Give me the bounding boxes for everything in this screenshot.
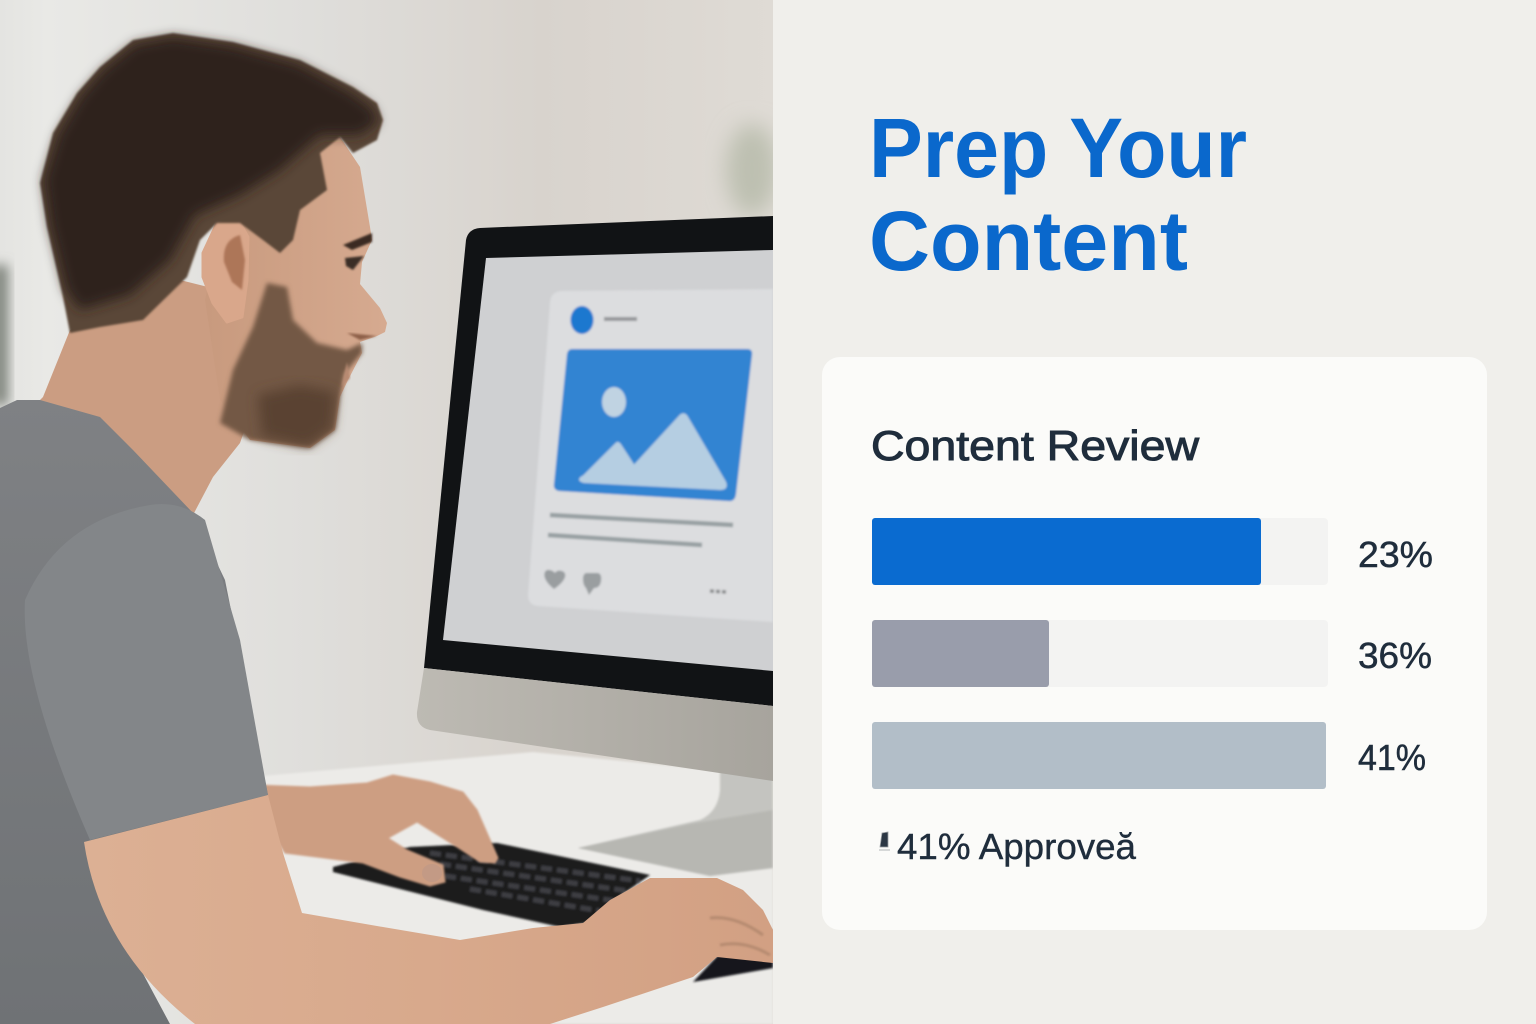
near arm and hand [84, 795, 773, 1024]
name line [604, 317, 637, 321]
blurred background objects [0, 124, 778, 405]
bar: 23% [872, 518, 1433, 585]
title [869, 101, 1247, 288]
white desk [262, 752, 773, 1024]
icon: small flag mark [879, 832, 890, 850]
monitor bezel [424, 216, 773, 706]
sleeve shading [25, 504, 268, 840]
eye [345, 256, 364, 270]
monitor [417, 216, 773, 781]
beard dark chin [258, 385, 335, 446]
text lines [550, 515, 733, 525]
knuckle shading [710, 918, 770, 955]
neck [40, 280, 244, 513]
eyebrow [343, 233, 372, 250]
wall background [0, 0, 773, 1024]
face [242, 137, 387, 448]
heart icon [544, 570, 565, 589]
hair dark core [44, 37, 378, 310]
monitor stand [578, 770, 773, 876]
image placeholder [554, 349, 752, 501]
bar: 41% [872, 722, 1426, 789]
sun [602, 387, 626, 417]
bar: 36% [872, 620, 1432, 687]
title: Content [869, 194, 1188, 288]
far hand thumbnail [422, 864, 442, 882]
ear [203, 223, 248, 322]
t-shirt [0, 400, 268, 1024]
avatar [570, 306, 594, 334]
panel: photo of man at computer [0, 0, 778, 1024]
bar: 41%: 41% [1358, 737, 1426, 778]
social post mockup [528, 289, 773, 622]
ear inner [224, 235, 245, 290]
man [0, 33, 773, 1024]
mountains [580, 414, 726, 489]
more dots [710, 591, 726, 592]
hair [40, 33, 383, 333]
approval summary: 41% Approveă [897, 826, 1137, 867]
lips [342, 362, 350, 386]
beard [220, 283, 362, 448]
panel: content review card [822, 357, 1487, 930]
post card [528, 289, 773, 622]
title: Prep Your [869, 101, 1247, 195]
card heading: Content Review [871, 422, 1200, 469]
far hand and arm [255, 775, 498, 886]
monitor screen [443, 250, 773, 671]
right panel background [773, 0, 1536, 1024]
bar: 23%: 23% [1358, 534, 1433, 575]
hair fade [40, 33, 383, 333]
comment icon [583, 573, 601, 595]
keyboard and mouse [333, 843, 773, 982]
bar: 36%: 36% [1358, 635, 1432, 676]
nose shading [347, 333, 377, 340]
monitor chin [417, 668, 773, 781]
